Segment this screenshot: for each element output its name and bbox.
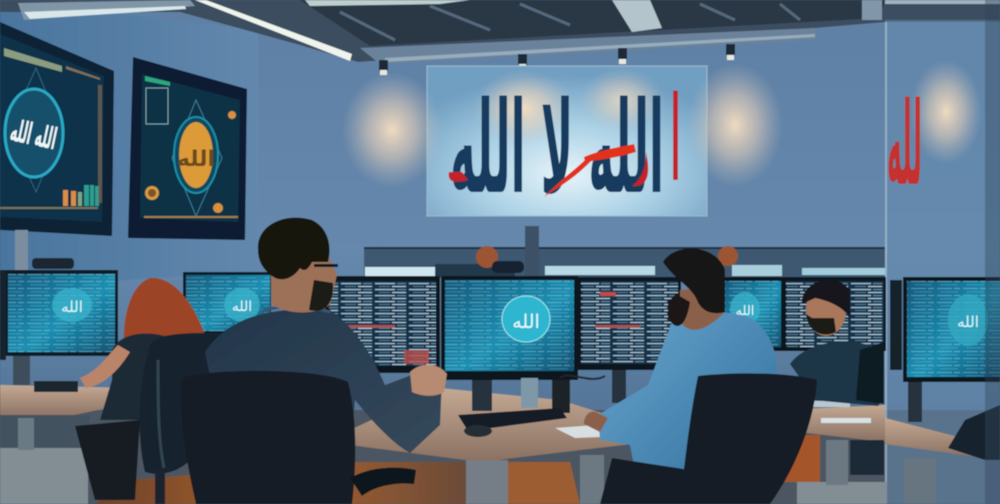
right desk — [780, 401, 887, 504]
panel: calligraphy mural — [342, 63, 783, 223]
background partition and far colleagues — [364, 226, 885, 278]
keyboard on left desk — [34, 381, 78, 392]
monitor: dark right of centre — [578, 277, 681, 403]
man in dark jacket at centre — [205, 218, 447, 460]
man seated far right — [790, 280, 884, 475]
monitor: second, behind centre man: الله — [232, 299, 252, 315]
keyboard and mouse on centre desk — [458, 408, 625, 438]
poster: second wall screen — [128, 57, 247, 240]
centre desk — [350, 388, 665, 504]
woman seated at left desk — [75, 278, 205, 500]
chair in front of centre man — [181, 371, 416, 504]
chair in front of right man — [680, 373, 817, 504]
woman chair — [140, 333, 225, 504]
monitor: left: الله — [61, 298, 83, 316]
floor — [95, 462, 470, 504]
spot lamps — [379, 44, 735, 75]
monitor: dark left of centre — [325, 276, 440, 373]
panel: calligraphy mural: ا — [671, 71, 680, 208]
poster: second wall screen: الله — [177, 147, 215, 172]
monitor: central cyan: الله — [512, 311, 540, 333]
panel: right glass partition: لله — [887, 77, 922, 212]
poster: left wall screen: الله الله — [7, 114, 60, 157]
cables and tower on desk — [521, 376, 605, 413]
calligraphy: navy and red strokes: الله لا الله — [450, 75, 664, 223]
man in light blue shirt at right — [584, 249, 777, 504]
medallion: gold calligraphy — [179, 122, 213, 188]
monitor: left — [5, 230, 118, 385]
poster: left wall screen — [0, 22, 114, 236]
ceiling with beams and lights — [0, 0, 1000, 64]
far-right desk and monitor: الله — [957, 313, 979, 331]
left wall — [0, 0, 258, 290]
wall light pools — [342, 63, 783, 188]
monitor: cyan right: الله — [736, 304, 754, 319]
monitor: second, behind centre man — [183, 272, 271, 334]
left desk — [0, 385, 135, 504]
far-right desk and monitor — [885, 277, 1000, 504]
panel: right glass partition — [885, 20, 1000, 504]
monitor: dark far right — [783, 277, 886, 351]
calligraphy: navy and red strokes — [449, 71, 680, 223]
lower room shadow — [0, 410, 1000, 504]
monitor: central cyan — [441, 276, 578, 411]
monitor: cyan right — [720, 277, 784, 351]
